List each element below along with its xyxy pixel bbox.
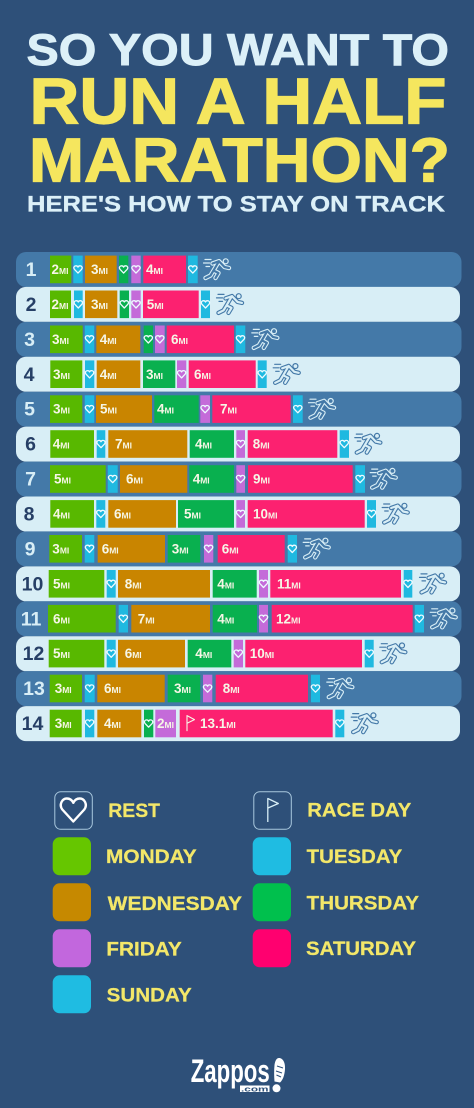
week 13: 8MI <box>223 681 240 696</box>
heading line: run a half: RUN A HALF <box>30 66 446 138</box>
legend: rest <box>55 792 160 829</box>
week 3: 3 <box>24 329 35 351</box>
legend <box>53 792 419 1013</box>
week 12: 12 <box>23 643 44 665</box>
week 1 <box>16 252 462 287</box>
legend: tuesday: TUESDAY <box>307 846 402 868</box>
legend: rest: REST <box>108 800 160 822</box>
legend: wednesday: WEDNESDAY <box>108 893 242 915</box>
week 9: 6MI <box>102 541 119 556</box>
week 2: 2 <box>26 294 37 316</box>
logo: zappos.com: .com <box>241 1084 269 1094</box>
week 12: 6MI <box>125 646 142 661</box>
week 12 <box>16 636 460 671</box>
legend: monday <box>53 837 197 875</box>
week 5: 5 <box>24 399 35 421</box>
week 8: 8 <box>24 504 35 526</box>
week 12: 10MI <box>250 646 274 661</box>
week 9: 9 <box>25 538 36 560</box>
week 5: 7MI <box>220 402 237 417</box>
week 3: 3MI <box>52 332 69 347</box>
week 11: 4MI <box>217 611 234 626</box>
week 2 <box>16 287 460 322</box>
week 14 <box>16 706 460 741</box>
week 6 <box>16 427 460 462</box>
legend: saturday: SATURDAY <box>306 938 416 960</box>
week 5 <box>16 392 462 427</box>
week 3: 4MI <box>100 332 117 347</box>
week 4: 3MI <box>53 367 70 382</box>
week 1: 2MI <box>52 262 68 277</box>
heading line: so you want to: SO YOU WANT TO <box>26 26 449 75</box>
week 12: 4MI <box>195 646 212 661</box>
week 7: 7 <box>25 469 36 491</box>
week 8 <box>16 496 460 532</box>
week 2: 2MI <box>52 297 68 312</box>
week 14: 2MI <box>157 716 174 731</box>
legend: thursday <box>253 883 419 921</box>
week 6: 4MI <box>195 437 212 452</box>
week 5: 3MI <box>53 402 70 417</box>
week 6: 7MI <box>115 437 132 452</box>
logo: zappos.com: Zappos <box>191 1053 270 1089</box>
week 10: 11MI <box>277 576 301 591</box>
week 4: 3MI <box>146 367 163 382</box>
week 11 <box>16 601 462 636</box>
week 8: 6MI <box>114 506 131 522</box>
week 14: 14 <box>22 713 43 735</box>
week 1: 1 <box>26 259 37 281</box>
legend: wednesday <box>53 883 242 921</box>
week 9: 3MI <box>172 541 189 556</box>
week 13: 6MI <box>104 681 121 696</box>
week 6: 8MI <box>253 437 270 452</box>
week 9 <box>16 531 462 566</box>
week 8: 5MI <box>184 506 201 522</box>
subtitle: HERE'S HOW TO STAY ON TRACK <box>27 192 446 216</box>
legend: race day <box>254 792 411 829</box>
week 14: 13.1MI <box>200 716 236 731</box>
week 8: 10MI <box>253 506 277 522</box>
legend: sunday <box>53 975 192 1013</box>
heading line: marathon: MARATHON? <box>29 126 450 196</box>
week 11: 6MI <box>53 611 70 626</box>
legend: monday: MONDAY <box>106 846 197 868</box>
legend: race day: RACE DAY <box>307 800 411 822</box>
week 8: 4MI <box>53 506 70 522</box>
legend: saturday <box>253 929 416 967</box>
week 11: 12MI <box>276 611 300 626</box>
week 5: 4MI <box>157 402 174 417</box>
legend: friday <box>53 929 182 967</box>
week 13: 13 <box>23 678 45 700</box>
week 7 <box>16 462 462 497</box>
week 7: 9MI <box>253 472 270 487</box>
week 10: 5MI <box>53 576 70 591</box>
week 13: 3MI <box>174 681 191 696</box>
week 1: 4MI <box>146 262 163 277</box>
week 7: 4MI <box>193 472 210 487</box>
week 11: 7MI <box>138 611 155 626</box>
week 6: 4MI <box>53 437 70 452</box>
week 9: 6MI <box>222 541 239 556</box>
week 13 <box>16 671 462 706</box>
week 10: 8MI <box>125 576 142 591</box>
week 10: 10 <box>22 573 43 595</box>
week 4: 4 <box>24 364 35 386</box>
week 11: 11 <box>21 608 41 630</box>
week 4: 4MI <box>100 367 117 382</box>
week 4 <box>16 357 460 392</box>
week 10 <box>16 566 460 601</box>
training plan chart <box>16 252 462 741</box>
week 12: 5MI <box>53 646 70 661</box>
week 14: 4MI <box>104 716 121 731</box>
legend: thursday: THURSDAY <box>307 893 419 915</box>
week 2: 3MI <box>91 297 108 312</box>
week 7: 6MI <box>126 472 143 487</box>
week 14: 3MI <box>55 716 72 731</box>
title <box>26 26 450 216</box>
legend: tuesday <box>253 837 402 875</box>
week 2: 5MI <box>147 297 164 312</box>
week 9: 3MI <box>52 541 69 556</box>
week 3 <box>16 322 462 357</box>
week 13: 3MI <box>55 681 72 696</box>
legend: sunday: SUNDAY <box>107 984 192 1006</box>
legend: friday: FRIDAY <box>106 939 182 961</box>
week 6: 6 <box>25 434 36 456</box>
week 3: 6MI <box>171 332 188 347</box>
week 4: 6MI <box>194 367 211 382</box>
week 10: 4MI <box>217 576 234 591</box>
week 5: 5MI <box>100 402 117 417</box>
week 1: 3MI <box>91 262 108 277</box>
week 7: 5MI <box>54 472 71 487</box>
